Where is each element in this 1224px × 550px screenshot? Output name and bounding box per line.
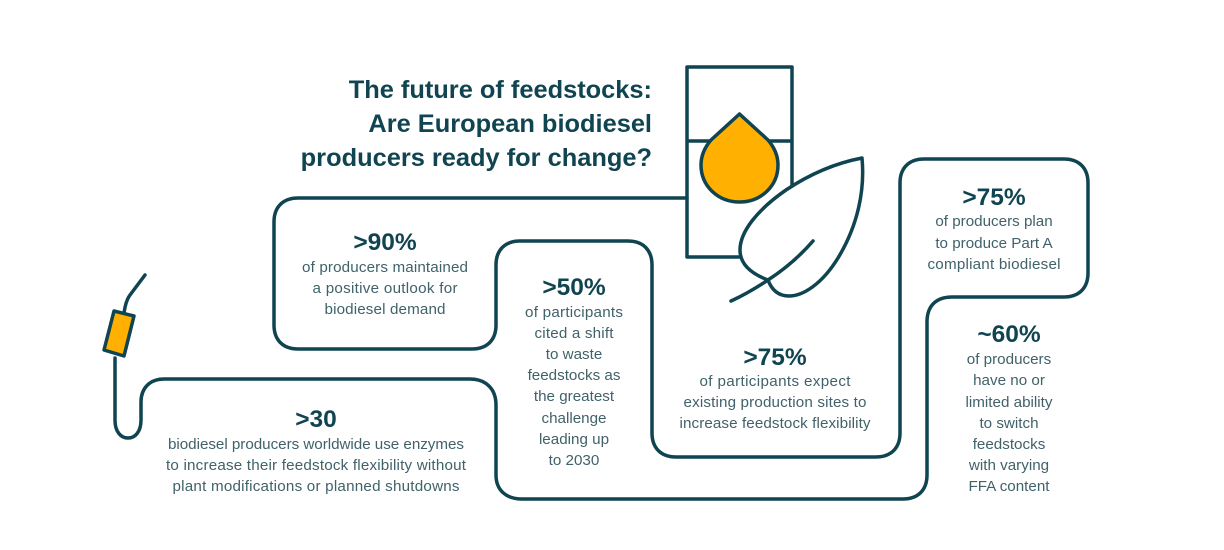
stat: ~60% producers limited ability: limited ability bbox=[966, 394, 1053, 411]
stat: ~60% producers limited ability: to switch bbox=[979, 415, 1039, 432]
title: Are European biodiesel bbox=[368, 110, 652, 138]
stat: >30 biodiesel producers use enzymes: biodiesel producers worldwide use enzymes bbox=[168, 436, 464, 453]
icon: biodiesel container with oil drop and leaf bbox=[687, 67, 863, 301]
stat: >75% participants expect flexibility: of participants expect bbox=[700, 373, 851, 390]
stat: >50% participants waste feedstocks: >50% bbox=[542, 274, 606, 301]
stat: >30 biodiesel producers use enzymes: >30 bbox=[295, 406, 337, 433]
winding pipeline outline bbox=[115, 159, 1088, 499]
stat: >50% participants waste feedstocks: to 2030 bbox=[549, 452, 599, 469]
stat: >50% participants waste feedstocks: the greatest bbox=[534, 388, 615, 405]
icon: fuel nozzle bbox=[104, 275, 145, 356]
stat: >50% participants waste feedstocks: leading up bbox=[539, 431, 609, 448]
stat: ~60% producers limited ability: ~60% bbox=[977, 321, 1041, 348]
stat: ~60% producers limited ability: FFA content bbox=[968, 478, 1050, 495]
stat: >30 biodiesel producers use enzymes bbox=[166, 406, 467, 495]
stat: >50% participants waste feedstocks: challenge bbox=[541, 410, 607, 427]
stat: >75% participants expect flexibility: existing production sites to bbox=[684, 394, 866, 411]
stat: >75% participants expect flexibility: >75% bbox=[743, 344, 807, 371]
stat: >90% producers outlook: of producers maintained bbox=[302, 259, 468, 276]
title: The future of feedstocks: bbox=[349, 76, 652, 104]
stat: >75% producers Part A: of producers plan bbox=[935, 213, 1053, 230]
icon: oil drop bbox=[701, 114, 778, 202]
stat: >90% producers outlook: >90% bbox=[353, 229, 417, 256]
stat: >75% participants expect flexibility: increase feedstock flexibility bbox=[680, 415, 871, 432]
stat: >90% producers outlook bbox=[302, 229, 468, 318]
stat: >30 biodiesel producers use enzymes: plant modifications or planned shutdowns bbox=[172, 478, 460, 495]
stat: >50% participants waste feedstocks: of participants bbox=[525, 304, 623, 321]
stat: >50% participants waste feedstocks: to waste bbox=[546, 346, 602, 363]
stat: ~60% producers limited ability: feedstocks bbox=[973, 436, 1046, 453]
stat: >50% participants waste feedstocks bbox=[525, 274, 623, 469]
title bbox=[301, 76, 652, 172]
title: producers ready for change? bbox=[301, 144, 652, 172]
stat: >75% participants expect flexibility bbox=[680, 344, 871, 432]
stat: >75% producers Part A: to produce Part A bbox=[935, 235, 1054, 252]
stat: >75% producers Part A bbox=[928, 184, 1060, 273]
leaf stem bbox=[731, 241, 813, 301]
stat: >90% producers outlook: a positive outlook for bbox=[312, 280, 458, 297]
stat: >30 biodiesel producers use enzymes: to increase their feedstock flexibility without bbox=[166, 457, 467, 474]
stat: ~60% producers limited ability: with varying bbox=[968, 457, 1049, 474]
stat: >50% participants waste feedstocks: cited a shift bbox=[534, 325, 614, 342]
stat: >50% participants waste feedstocks: feedstocks as bbox=[528, 367, 621, 384]
stat: >75% producers Part A: >75% bbox=[962, 184, 1026, 211]
stat: >90% producers outlook: biodiesel demand bbox=[324, 301, 446, 318]
container bbox=[687, 67, 792, 257]
stat: ~60% producers limited ability: of producers bbox=[967, 351, 1052, 368]
stat: ~60% producers limited ability bbox=[966, 321, 1053, 495]
stat: >75% producers Part A: compliant biodiesel bbox=[928, 256, 1060, 273]
stat: ~60% producers limited ability: have no or bbox=[973, 372, 1045, 389]
icon: leaf bbox=[740, 158, 863, 296]
